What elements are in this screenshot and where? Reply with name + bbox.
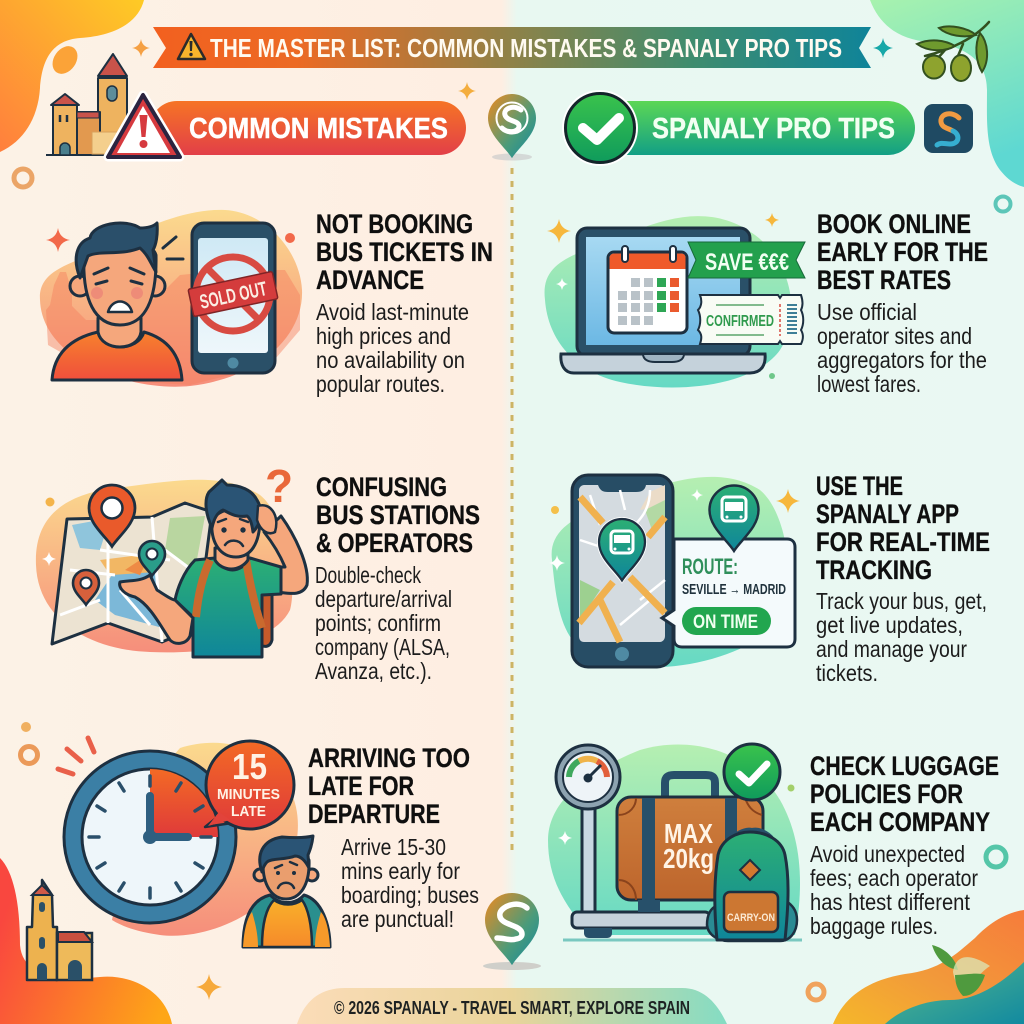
description — [817, 299, 987, 397]
heading: BUS STATIONS — [316, 500, 480, 530]
heading: POLICIES FOR — [810, 779, 963, 809]
icon: olive branch — [917, 22, 989, 81]
panel: arriving too late — [27, 738, 479, 980]
description: fees; each operator — [810, 865, 978, 891]
panel: confusing bus stations — [36, 460, 480, 684]
illustration: luggage scale — [548, 744, 802, 941]
illustration: map and confused traveller: ? — [265, 460, 293, 512]
pill — [150, 101, 466, 155]
description: company (ALSA, — [315, 634, 450, 660]
description — [315, 562, 452, 684]
heading: FOR REAL-TIME — [816, 527, 990, 557]
heading: EACH COMPANY — [810, 807, 990, 837]
icon: castle top left — [46, 54, 127, 155]
illustration: phone tracking — [549, 475, 800, 667]
illustration: late clock: LATE — [231, 803, 266, 820]
illustration: luggage scale: MAX — [664, 818, 713, 849]
description: tickets. — [816, 660, 878, 686]
illustration: late clock: MINUTES — [217, 786, 280, 803]
footer band — [297, 988, 727, 1024]
description: operator sites and — [817, 323, 972, 349]
decorative blob: top right — [870, 0, 1024, 187]
description: no availability on — [316, 347, 465, 373]
illustration: laptop and ticket: CONFIRMED — [706, 313, 774, 330]
illustration: sold out: SOLD OUT — [198, 278, 269, 314]
heading — [308, 743, 470, 829]
description: Arrive 15-30 — [341, 834, 446, 860]
description: departure/arrival — [315, 586, 452, 612]
title ribbon — [153, 27, 871, 68]
description: Avoid unexpected — [810, 841, 965, 867]
heading: DEPARTURE — [308, 799, 440, 829]
illustration: luggage scale: CARRY-ON — [727, 912, 775, 924]
illustration: phone tracking: ON TIME — [693, 612, 758, 633]
description: points; confirm — [315, 610, 441, 636]
description: aggregators for the — [817, 347, 987, 373]
description: Double-check — [315, 562, 421, 588]
description — [341, 834, 479, 932]
panel: book online early — [545, 209, 988, 397]
illustration: phone tracking: ROUTE: — [682, 554, 738, 579]
description — [316, 299, 469, 397]
decorative blob: top left — [0, 0, 144, 152]
description: high prices and — [316, 323, 451, 349]
description: Avanza, etc.). — [315, 658, 432, 684]
heading: BOOK ONLINE — [817, 209, 971, 239]
description: lowest fares. — [817, 371, 921, 397]
illustration: sold out — [40, 210, 302, 387]
centre dashed divider — [510, 168, 514, 855]
description: Use official — [817, 299, 917, 325]
heading: LATE FOR — [308, 771, 414, 801]
illustration: laptop and ticket: SAVE €€€ — [705, 249, 789, 276]
decorative blob: bottom right — [833, 910, 1024, 1024]
description — [810, 841, 978, 939]
illustration: laptop and ticket — [545, 213, 805, 387]
heading: SPANALY APP — [816, 499, 959, 529]
heading: & OPERATORS — [316, 528, 473, 558]
description: mins early for — [341, 858, 460, 884]
illustration: phone tracking: SEVILLE → MADRID — [682, 581, 786, 598]
heading text: COMMON MISTAKES — [189, 113, 448, 145]
heading: NOT BOOKING — [316, 209, 473, 239]
description: Avoid last-minute — [316, 299, 469, 325]
description: has htest different — [810, 889, 971, 915]
header: common mistakes — [108, 95, 466, 157]
panel: check luggage policies — [548, 744, 999, 941]
heading — [810, 751, 999, 837]
description: and manage your — [816, 636, 967, 662]
description: boarding; buses — [341, 882, 479, 908]
heading: ADVANCE — [316, 265, 424, 295]
description: popular routes. — [316, 371, 445, 397]
panel: not booking in advance — [40, 209, 493, 397]
icon: castle bottom left — [27, 880, 92, 980]
heading — [817, 209, 988, 295]
heading: USE THE — [816, 471, 903, 501]
heading: BEST RATES — [817, 265, 951, 295]
illustration: late clock: 15 — [232, 746, 267, 787]
description: Track your bus, get, — [816, 588, 987, 614]
heading: TRACKING — [816, 555, 932, 585]
description: get live updates, — [816, 612, 963, 638]
decorative blob: bottom left — [0, 858, 172, 1024]
heading: ARRIVING TOO — [308, 743, 470, 773]
illustration: map and confused traveller — [36, 460, 307, 657]
illustration: late clock — [58, 738, 330, 947]
header: pro tips — [562, 90, 915, 166]
centre logo pin bottom — [483, 893, 541, 970]
description: baggage rules. — [810, 913, 938, 939]
icon: warning triangle — [108, 95, 180, 157]
heading: CONFUSING — [316, 472, 447, 502]
icon: spanaly app — [924, 104, 973, 153]
centre logo pin top — [488, 94, 536, 160]
decorative blob: top left oval — [47, 41, 83, 79]
decorative olive leaves bottom right — [932, 945, 990, 996]
footer text: © 2026 SPANALY - TRAVEL SMART, EXPLORE SPAIN — [334, 998, 690, 1018]
heading: BUS TICKETS IN — [316, 237, 493, 267]
title text: THE MASTER LIST: COMMON MISTAKES & SPANALY PRO TIPS — [210, 33, 842, 63]
heading — [316, 209, 493, 295]
icon: warning triangle small — [178, 34, 205, 59]
icon: green check — [562, 90, 638, 166]
description — [816, 588, 987, 686]
illustration: luggage scale: 20kg — [663, 843, 714, 874]
pill — [600, 101, 915, 155]
heading — [816, 471, 990, 585]
description: are punctual! — [341, 906, 454, 932]
panel: use the spanaly app — [549, 471, 990, 686]
heading text: SPANALY PRO TIPS — [652, 113, 895, 145]
heading — [316, 472, 480, 558]
